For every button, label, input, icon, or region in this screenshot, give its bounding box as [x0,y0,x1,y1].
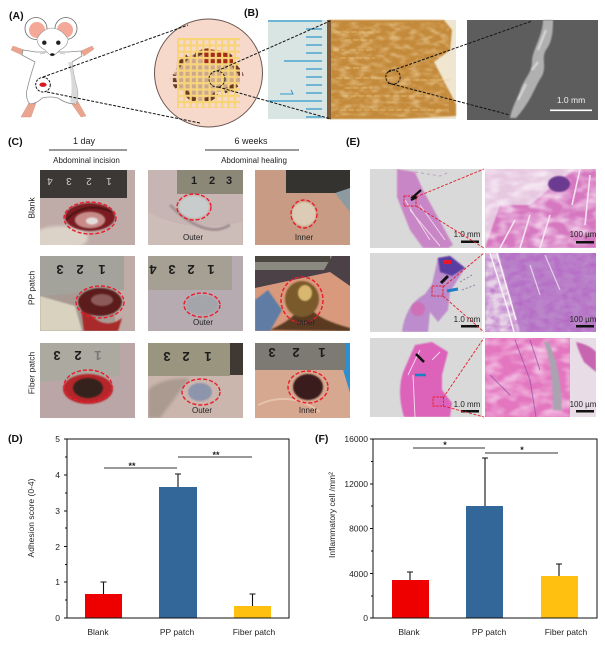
photo: blank 1 day: 4 [47,175,53,186]
photo: PP patch outer [148,256,243,331]
photo: fiber patch outer: 3 [163,349,171,364]
bar chart: adhesion score [26,434,289,637]
chart D error bars [100,474,256,606]
mouse feet [21,100,86,117]
photo: PP patch outer: 3 [168,262,176,277]
chart F error bars [407,458,562,580]
chart F y tick labels [344,434,368,623]
photo: PP patch inner: Inner [297,318,315,327]
heading: 6 weeks: 6 weeks [234,136,268,146]
photo: fiber patch 1 day: 2 [74,348,82,363]
chart D bars [85,487,271,618]
histology high mag: blank [485,169,597,248]
photo: blank outer: Outer [183,233,203,242]
chart D y tick labels: 4 [55,470,60,480]
photo: fiber patch 1 day: 1 [94,348,102,363]
photo: PP patch outer: Outer [193,318,213,327]
panel label E: (E) [346,136,360,148]
photo: blank inner [255,170,350,245]
photo: fiber patch inner: 3 [268,345,276,360]
chart F y tick labels: 12000 [344,479,368,489]
photo: fiber patch inner: 1 [318,345,326,360]
photo: PP patch 1 day [40,256,135,331]
chart F significance brackets [413,440,558,455]
photo: PP patch outer: 2 [187,262,195,277]
red zoom connector lines [416,169,484,417]
chart D x labels: Blank [87,627,109,637]
photo: PP patch 1 day: 3 [56,262,64,277]
heading: 6 weeks [205,136,299,165]
photo: fiber patch 1 day: 3 [53,348,61,363]
photo: blank 1 day: 3 [66,175,72,186]
chart D x labels: PP patch [160,627,194,637]
chart D axes [64,439,289,618]
photo: fiber patch inner [255,343,350,418]
photo: fiber patch outer: 2 [182,349,190,364]
histology high mag: PP patch: 100 µm [570,315,597,324]
photo: fiber patch inner: 2 [292,345,300,360]
chart D x labels [87,627,276,637]
photo: fiber patch outer: 1 [204,349,212,364]
photo: blank outer: 2 [209,175,215,187]
chart F bars [392,506,578,618]
heading: 6 weeks: Abdominal healing [221,156,287,165]
chart F significance brackets: * [520,445,524,455]
chart F y tick labels: 4000 [349,569,368,579]
histology low mag: PP patch: 1.0 mm [454,315,481,324]
photo: blank 1 day: 2 [86,175,92,186]
chart D x labels: Fiber patch [233,627,276,637]
chart F axes [370,439,597,618]
photo: fiber patch 1 day [40,343,135,418]
chart D significance brackets: ** [128,461,136,471]
photo: ruler with blue ticks [268,20,328,119]
chart D y tick labels: 1 [55,577,60,587]
icon: mouse [11,18,94,117]
photo: SEM twisted fiber [467,20,598,120]
chart F y axis title: Inflammatory cell /mm² [327,472,337,558]
chart F x labels: Fiber patch [545,627,588,637]
chart F x labels [398,627,588,637]
heading: 1 day: 1 day [73,136,96,146]
photo: PP patch inner [255,256,350,331]
photo: blank outer [148,170,243,245]
photo: fiber patch outer: Outer [192,406,212,415]
mouse body [22,50,82,104]
histology low mag: PP patch [370,253,482,332]
chart D y tick labels: 5 [55,434,60,444]
histology high mag: fiber patch [485,338,597,417]
chart D y axis title: Adhesion score (0-4) [26,478,36,557]
photo: PP patch outer: 1 [207,262,215,277]
chart D y tick labels: 0 [55,613,60,623]
panel label F: (F) [315,433,328,445]
bar chart: inflammatory cell density [327,434,597,637]
histology low mag: blank: 1.0 mm [454,230,481,239]
chart F x labels: Blank [398,627,420,637]
histology high mag: fiber patch: 100 µm [570,400,597,409]
histology high mag: blank: 100 µm [570,230,597,239]
chart D significance brackets [104,450,252,471]
row label: Fiber patch: Fiber patch [26,351,36,394]
chart D y tick labels: 3 [55,506,60,516]
photo: blank 1 day: 1 [106,175,112,186]
circle: implanted mesh on tissue [154,19,262,127]
photo: blank 1 day [40,170,135,245]
SEM scale label: 1.0 mm [557,95,585,105]
mouse ears [25,18,47,40]
photo: blank inner: Inner [295,233,313,242]
chart F y tick labels: 0 [363,613,368,623]
mouse head [37,28,68,56]
zoom connector lines [43,21,532,123]
panel label D: (D) [8,433,23,445]
chart F x labels: PP patch [472,627,506,637]
chart F y tick labels: 8000 [349,524,368,534]
photo: PP patch outer: 4 [149,262,157,277]
chart D y tick labels [55,434,60,623]
photo: PP patch 1 day: 2 [76,262,84,277]
histology high mag: PP patch [485,253,597,332]
histology low mag: blank [370,169,482,248]
mouse hands [11,46,94,56]
photo: woven fiber patch [327,20,456,119]
histology low mag: fiber patch: 1.0 mm [454,400,481,409]
panel label A: (A) [9,10,24,22]
chart D y tick labels: 2 [55,542,60,552]
row label: Blank: Blank [26,197,36,219]
panel label B: (B) [244,7,259,19]
photo: blank outer: 3 [226,175,232,187]
panel label C: (C) [8,136,23,148]
chart F significance brackets: * [443,440,447,450]
heading: 1 day: Abdominal incision [53,156,120,165]
mouse implant circle [36,77,50,92]
chart D significance brackets: ** [212,450,220,460]
photo: PP patch 1 day: 1 [98,262,106,277]
heading: 1 day [49,136,127,165]
histology low mag: fiber patch [370,338,482,417]
photo: fiber patch inner: Inner [299,406,317,415]
row label: PP patch: PP patch [26,271,36,305]
chart F y tick labels: 16000 [344,434,368,444]
photo: fiber patch outer [148,343,243,418]
photo: blank outer: 1 [191,175,197,187]
SEM scale bar [550,110,592,111]
